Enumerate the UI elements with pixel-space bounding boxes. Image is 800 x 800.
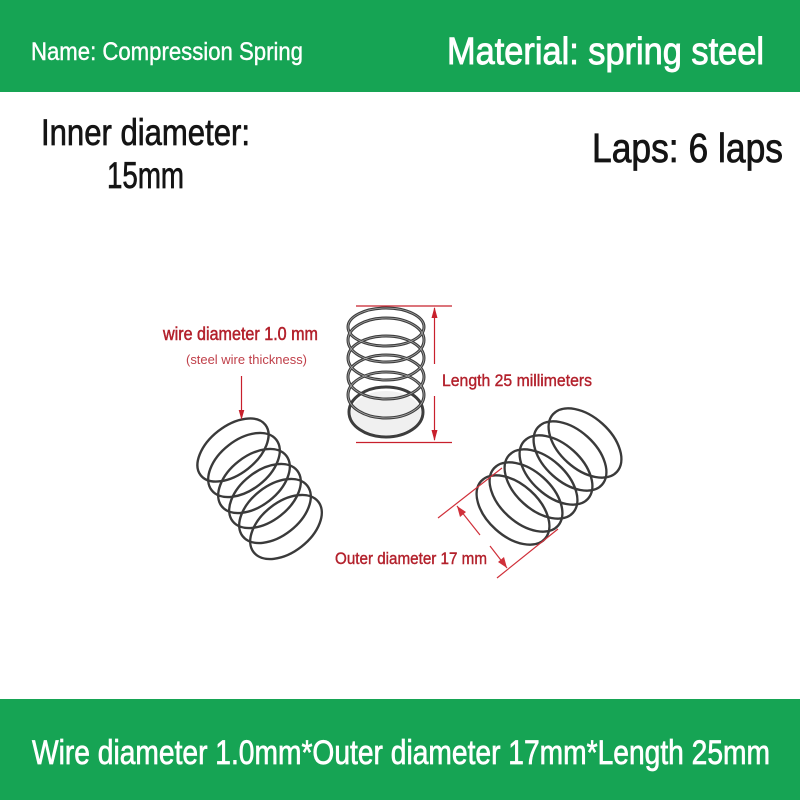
outer diameter dimension arrows [438,468,558,578]
material label: Material: spring steel [447,31,764,73]
middle spring [348,308,424,437]
inner diameter text [41,112,250,196]
outer diameter label: Outer diameter 17 mm [335,549,487,568]
inner diameter text: 15mm [107,155,184,196]
length label: Length 25 millimeters [442,371,592,390]
wire diameter label [162,324,318,367]
length dimension arrow [356,306,452,442]
footer band [0,699,800,800]
right spring [464,395,634,558]
wire diameter label: wire diameter 1.0 mm [162,324,318,344]
wire diameter label: (steel wire thickness) [186,353,307,367]
inner diameter text: Inner diameter: [41,112,250,153]
header band [0,0,800,92]
name label: Name: Compression Spring [31,38,303,66]
left spring [186,406,334,572]
wire diameter arrow [239,376,244,420]
